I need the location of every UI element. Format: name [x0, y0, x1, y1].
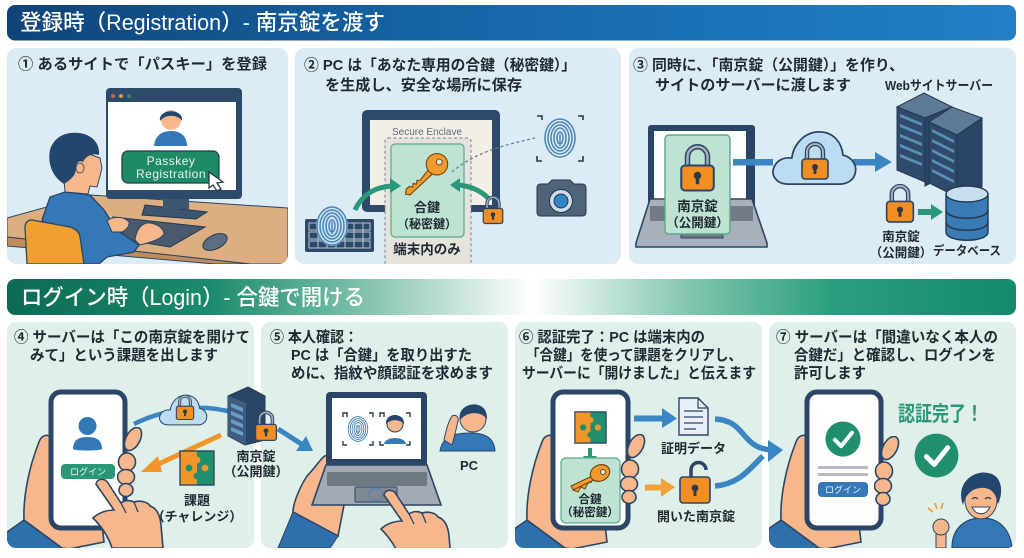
phone showing success: ログイン — [825, 484, 861, 495]
blue arrow from server to laptop — [278, 429, 313, 451]
step 2 heading: を生成し、安全な場所に保存 — [325, 76, 522, 94]
panel: step 5 identity check — [261, 322, 508, 558]
phone with puzzle and private key: 合鍵 — [578, 492, 602, 506]
step 5 heading: PC は「合鍵」を取り出すた — [291, 346, 472, 364]
laptop with public key card — [636, 125, 767, 247]
laptop with public key card: 南京錠 — [677, 198, 718, 214]
step 4 heading — [14, 328, 250, 364]
illustration: device with secure enclave: （秘密鍵） — [397, 216, 457, 231]
phone showing success — [769, 390, 900, 548]
success message: 認証完了！ — [898, 403, 983, 426]
illustration: desk, monitor and person: Registration — [136, 167, 206, 181]
step 6 heading — [519, 328, 756, 382]
step 7 heading: 合鍵だ」と確認し、ログインを — [794, 346, 996, 364]
panel: step 1 register passkey — [7, 48, 288, 264]
step 1 heading: ① あるサイトで「パスキー」を登録 — [18, 55, 267, 73]
step 2 heading: ② PC は「あなた専用の合鍵（秘密鍵）」 — [304, 56, 576, 74]
header: login — [7, 279, 1016, 315]
step 7 heading — [776, 328, 998, 382]
step 3 heading: サイトのサーバーに渡します — [655, 76, 851, 94]
panel: step 4 challenge — [0, 322, 254, 558]
happy person — [928, 473, 1012, 548]
heading: login title: ログイン時（Login）- 合鍵で開ける — [21, 285, 365, 310]
server with lock, overlapping steps 4 and 5: （公開鍵） — [223, 464, 289, 479]
illustration: desk, monitor and person: Passkey — [147, 154, 195, 168]
step 4 heading: ④ サーバーは「この南京錠を開けて — [14, 328, 250, 346]
illustration: desk, monitor and person — [7, 88, 288, 264]
orange arrow and puzzle challenge: 課題 — [184, 493, 210, 508]
laptop with public key card: （公開鍵） — [666, 215, 729, 230]
step 4 heading: みて」という課題を出します — [30, 347, 218, 364]
phone held in hand — [0, 392, 163, 558]
arrow and cloud to server — [733, 132, 892, 184]
step 6 heading: 「合鍵」を使って課題をクリアし、 — [526, 346, 742, 364]
step 2 heading — [304, 56, 576, 94]
person touching finger sensor: PC — [460, 458, 479, 473]
step 7 heading: ⑦ サーバーは「間違いなく本人の — [776, 328, 998, 346]
opened lock — [645, 463, 735, 524]
step 6 heading: サーバーに「開けました」と伝えます — [522, 365, 756, 382]
server with lock, overlapping steps 4 and 5 — [223, 387, 289, 479]
opened lock: 開いた南京錠 — [657, 509, 735, 524]
proof data — [634, 398, 726, 456]
step 5 heading — [270, 328, 493, 382]
database with lock — [870, 186, 1001, 260]
database with lock: （公開鍵） — [870, 245, 932, 260]
illustration: device with secure enclave: Secure Enclave — [392, 127, 462, 138]
heading: registration title: 登録時（Registration）- 南京錠を渡す — [20, 10, 385, 35]
database with lock: 南京錠 — [882, 229, 920, 244]
step 5 heading: ⑤ 本人確認： — [270, 328, 358, 346]
step 3 heading: ③ 同時に、「南京錠（公開鍵）」を作り、 — [633, 56, 904, 74]
server label: Webサイトサーバー — [885, 78, 993, 93]
step 6 heading: ⑥ 認証完了：PC は端末内の — [519, 328, 705, 346]
phone with puzzle and private key: （秘密鍵） — [561, 505, 619, 519]
proof data: 証明データ — [661, 441, 726, 456]
panel: step 3 public key — [629, 48, 1016, 264]
server with lock, overlapping steps 4 and 5: 南京錠 — [236, 449, 276, 464]
orange arrow and puzzle challenge — [141, 435, 242, 524]
merging blue arrows into step 7 — [715, 419, 783, 486]
laptop with biometric prompt and hands — [278, 392, 451, 558]
illustration: device with secure enclave — [305, 110, 586, 278]
header: registration — [7, 5, 1016, 40]
panel: step 2 private key — [295, 48, 621, 278]
large check icon — [915, 434, 958, 477]
step 7 heading: 許可します — [794, 365, 866, 382]
illustration: device with secure enclave: 端末内のみ — [393, 241, 461, 257]
person touching finger sensor — [440, 404, 495, 473]
cloud and blue curve — [134, 395, 232, 425]
phone held in hand: ログイン — [70, 466, 106, 477]
phone with puzzle and private key — [515, 390, 646, 548]
step 3 heading — [633, 56, 904, 94]
panel: step 6 authentication — [502, 322, 762, 558]
orange arrow and puzzle challenge: （チャレンジ） — [152, 509, 242, 524]
server racks — [897, 93, 982, 197]
database with lock: データベース — [933, 243, 1001, 258]
illustration: device with secure enclave: 合鍵 — [414, 200, 440, 215]
panel: step 7 login allowed — [756, 322, 1016, 558]
step 5 heading: めに、指紋や顔認証を求めます — [291, 364, 493, 382]
